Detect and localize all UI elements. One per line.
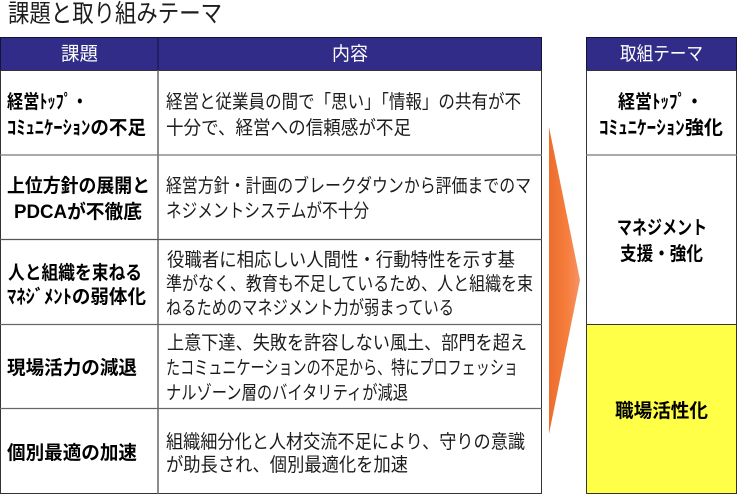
- row 3: 準がなく、教育も不足しているため、人と組織を束: [166, 273, 533, 295]
- row 4: [7, 332, 527, 404]
- theme: management top communication: ｺﾐｭﾆｹｰｼｮﾝ強化: [599, 117, 723, 139]
- theme: management top communication: [586, 70, 736, 155]
- row 5: [7, 431, 525, 476]
- row 5: 組織細分化と人材交流不足により、守りの意識: [166, 431, 525, 453]
- panel: themes table: [586, 38, 737, 494]
- theme: management support: マネジメント: [617, 217, 707, 239]
- row 2: 経営方針・計画のブレークダウンから評価までのマ: [166, 174, 531, 197]
- themes header: 取組テーマ: [620, 43, 703, 65]
- row 2: PDCAが不徹底: [14, 200, 142, 223]
- row 4: 現場活力の減退: [7, 356, 137, 379]
- row 1: [7, 91, 521, 139]
- row 5: が助長され、個別最適化を加速: [166, 454, 408, 476]
- table header: 内容: [332, 43, 368, 65]
- row 2: 上位方針の展開と: [7, 174, 150, 197]
- theme: management support: [586, 155, 737, 324]
- row 2: ネジメントシステムが不十分: [166, 200, 369, 222]
- row 5: 個別最適の加速: [7, 442, 137, 464]
- title: 課題と取り組みテーマ: [8, 0, 222, 28]
- row 4: たコミュニケーションの不足から、特にプロフェッショ: [166, 357, 518, 379]
- table header: 課題: [61, 44, 98, 65]
- row 1: 経営と従業員の間で「思い」「情報」の共有が不: [166, 91, 521, 113]
- theme: management top communication: 経営ﾄｯﾌﾟ・: [618, 91, 703, 113]
- panel: issues table: [0, 37, 542, 494]
- row 3: ねるためのマネジメント力が弱まっている: [166, 297, 454, 319]
- row 1: ｺﾐｭﾆｹｰｼｮﾝの不足: [7, 118, 146, 139]
- row 3: ﾏﾈｼﾞﾒﾝﾄの弱体化: [7, 286, 146, 308]
- row 4: ナルゾーン層のバイタリティが減退: [166, 382, 408, 404]
- row 1: 経営ﾄｯﾌﾟ・: [7, 91, 88, 113]
- row 3: [7, 249, 533, 319]
- theme: workplace activation: 職場活性化: [615, 400, 708, 422]
- theme: management support: 支援・強化: [620, 243, 703, 265]
- arrow: [549, 127, 580, 434]
- table grid: [0, 70, 542, 494]
- row 1: 十分で、経営への信頼感が不足: [166, 117, 411, 139]
- row 3: 人と組織を束ねる: [8, 262, 142, 284]
- row 3: 役職者に相応しい人間性・行動特性を示す基: [167, 249, 515, 271]
- table header: [0, 37, 542, 70]
- theme: workplace activation: [586, 324, 736, 494]
- row 2: [7, 174, 531, 223]
- row 4: 上意下達、失敗を許容しない風土、部門を超え: [167, 332, 527, 354]
- themes header: [586, 38, 736, 70]
